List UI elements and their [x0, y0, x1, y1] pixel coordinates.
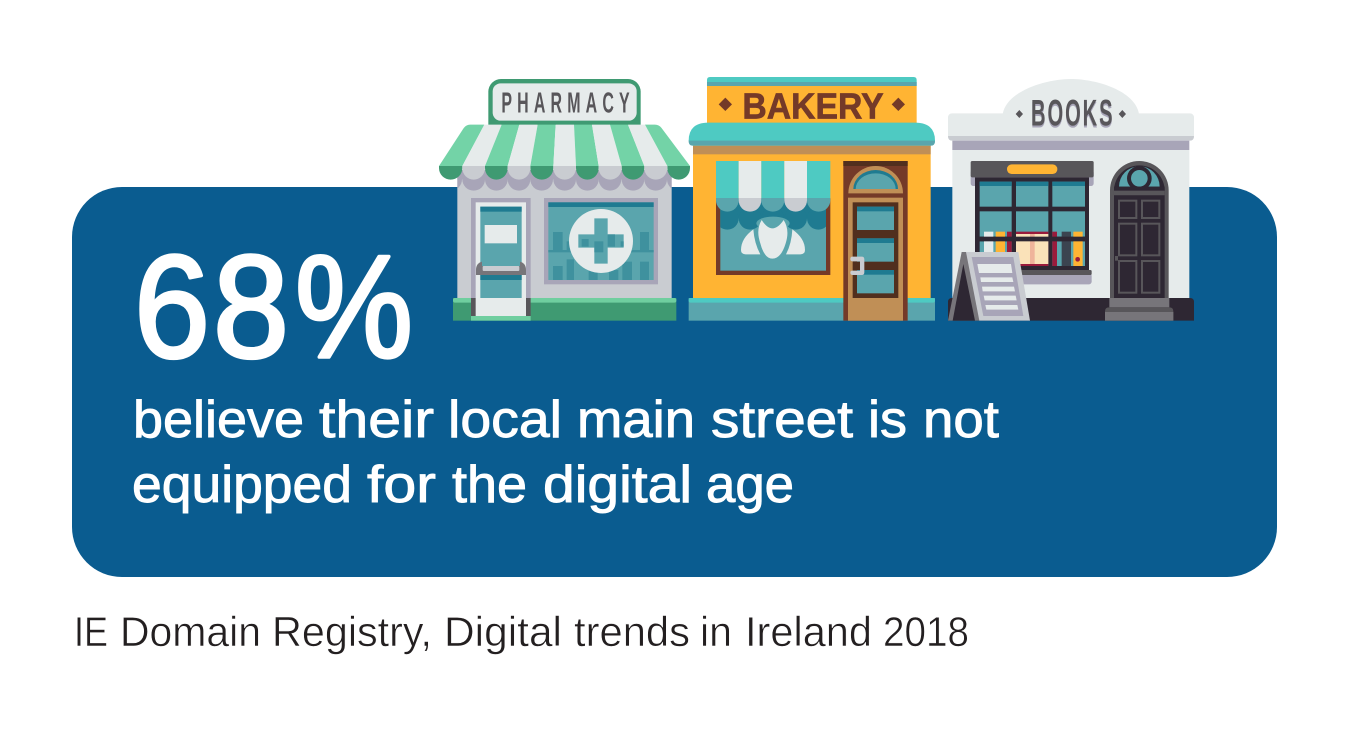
heading: 68% statistic: 6 [134, 225, 210, 388]
text block: statistic description: equipped [132, 456, 352, 514]
bookshop wall [952, 141, 1189, 300]
bookshop window [971, 161, 1094, 284]
sandwich board sign [948, 252, 1030, 321]
text block: statistic description: is [868, 391, 907, 449]
text block: source citation: Ireland [745, 608, 872, 655]
bakery sign: BAKERY [742, 85, 884, 126]
text block: statistic description [132, 391, 1000, 514]
pharmacy window with cross [544, 198, 658, 284]
text block: source citation: in [700, 608, 732, 655]
text block: statistic description: street [711, 391, 854, 449]
text block: statistic description: age [706, 456, 794, 514]
heading: 68% statistic: % [295, 225, 413, 388]
pharmacy door [471, 198, 531, 321]
bakery sign [707, 77, 917, 126]
text block: statistic description: believe [133, 391, 304, 449]
bakery base [689, 298, 935, 321]
text block: statistic description: their [319, 391, 434, 449]
bookshop sign [948, 79, 1194, 141]
bookshop sign: BOOKS [1031, 93, 1113, 134]
panel: blue rounded background [72, 187, 1277, 577]
pharmacy sign [488, 79, 641, 125]
croissant [741, 217, 805, 259]
icon: bakery shop [689, 77, 935, 321]
books on display [984, 232, 1083, 266]
pharmacy base [453, 298, 676, 321]
bookshop door [1105, 161, 1173, 321]
bakery wall [693, 146, 931, 300]
heading: 68% statistic: 8 [213, 225, 289, 388]
bakery window with croissant [716, 161, 830, 275]
text block: source citation: Registry, [272, 608, 432, 655]
pharmacy awning [439, 125, 690, 180]
text block: source citation: 2018 [883, 608, 969, 655]
icon: bookshop [948, 79, 1194, 321]
pharmacy sign: PHARMACY [501, 86, 630, 119]
text block: source citation: Digital [444, 608, 562, 655]
text block: statistic description: local [448, 391, 562, 449]
text block: statistic description: not [923, 391, 1000, 449]
pharmacy lilac scallops [457, 170, 672, 191]
text block: statistic description: the [452, 456, 527, 514]
pharmacy wall [457, 173, 672, 300]
bookshop ground [948, 298, 1194, 321]
text block: statistic description: for [367, 456, 436, 514]
bakery cornice [689, 123, 935, 154]
bakery window awning [716, 161, 830, 212]
icon: pharmacy shop [439, 79, 690, 321]
bakery door [843, 161, 908, 321]
text block: statistic description: main [577, 391, 695, 449]
text block: source citation: Domain [120, 608, 261, 655]
text block: source citation: IE [74, 608, 108, 655]
text block: statistic description: digital [543, 456, 692, 514]
text block: source citation: trends [574, 608, 690, 655]
